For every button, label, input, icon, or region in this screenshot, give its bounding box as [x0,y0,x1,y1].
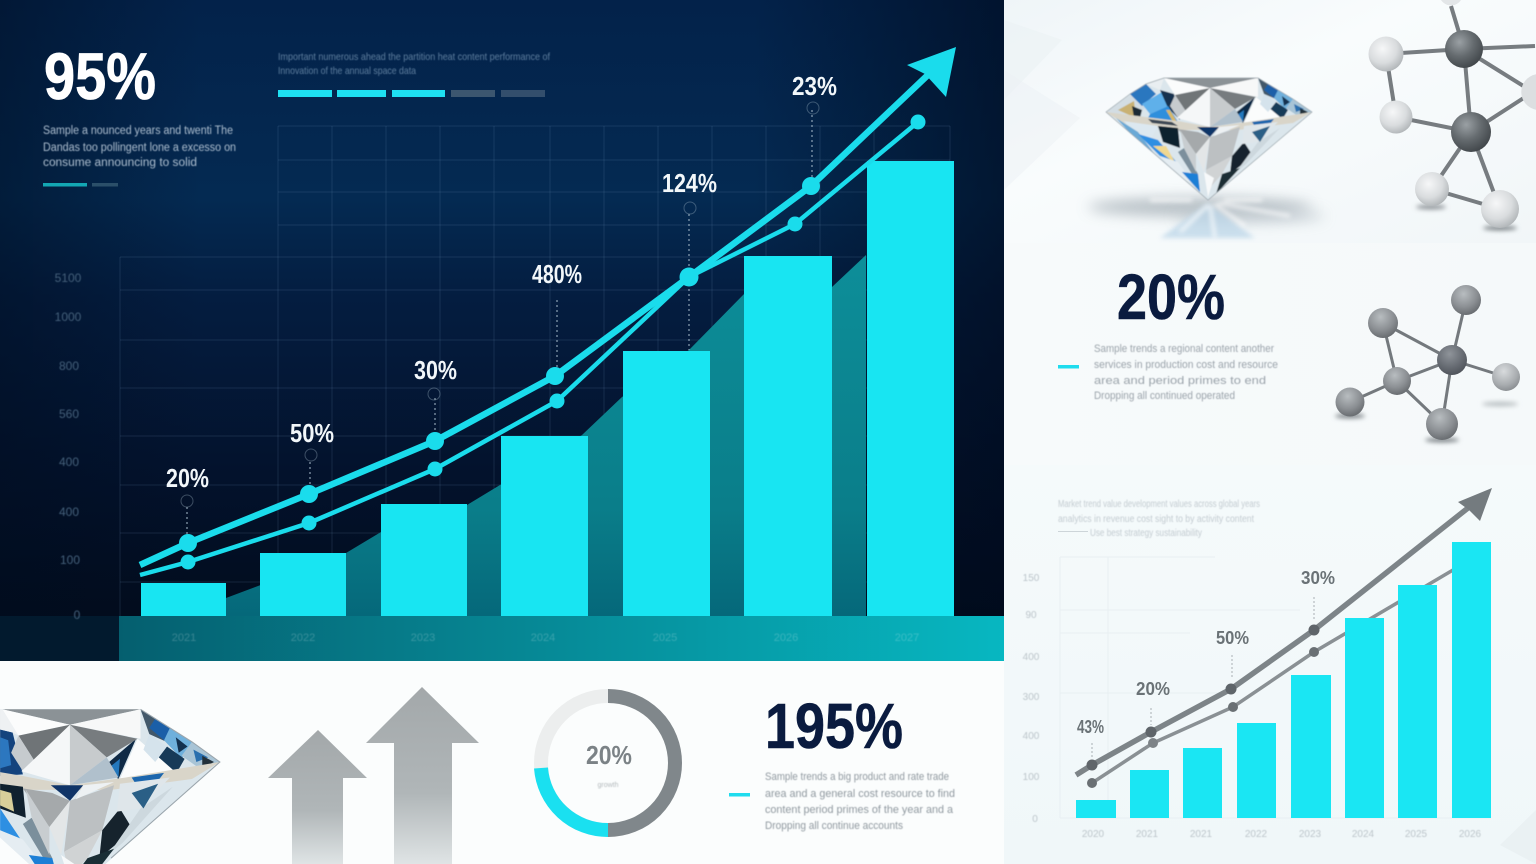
icon: small up arrow [268,730,367,864]
y axis labels: 800 [59,359,79,373]
y axis labels: 400 [1023,731,1040,742]
description text left: consume announcing to solid [43,157,197,169]
x axis labels: 2027 [895,632,919,644]
y axis labels: 150 [1023,573,1040,584]
x axis labels: 2024 [1352,829,1375,840]
y axis labels: 400 [59,505,79,519]
y axis labels: 560 [59,407,79,421]
percentage labels: 20% [166,463,209,493]
y axis labels: 300 [1023,692,1040,703]
description text [1094,343,1278,402]
percentage labels: 23% [792,71,837,101]
y axis labels: 100 [60,553,80,567]
x axis labels: 2024 [531,632,555,644]
x axis labels: 2026 [1459,829,1482,840]
panel: bottom row [0,661,1004,864]
description text: content period primes of the year and a [765,804,954,816]
x axis labels: 2023 [1299,829,1322,840]
leaders [1092,597,1314,758]
donut chart [541,696,675,830]
description text: Sample trends a regional content another [1094,343,1274,355]
faint header text: Use best strategy sustainability [1090,528,1202,539]
x axis labels: 2025 [653,632,677,644]
header text: Innovation of the annual space data [278,65,416,77]
description text left: Dandas too pollingent lone a excesso on [43,142,236,154]
y axis labels: 100 [1023,772,1040,783]
description text: Sample trends a big product and rate trade [765,771,949,783]
trend line lower [140,114,926,575]
icon: diamond shadow [1088,198,1325,238]
icon: big up arrow [366,687,479,864]
x axis labels: 2020 [1082,829,1105,840]
grey trend arrow [1076,488,1492,775]
description text: area and a general cost resource to find [765,788,955,800]
x axis labels: 2022 [291,632,315,644]
y axis labels: 400 [59,455,79,469]
percentage labels: 480% [532,259,582,289]
accent dash [1058,365,1079,368]
faint header text [1058,499,1260,539]
lower grey line [1087,570,1453,788]
x axis labels: 2021 [1136,829,1159,840]
percentage labels: 20% [1136,679,1170,699]
y axis labels: 400 [1023,652,1040,663]
y axis labels: 1000 [55,310,82,324]
icon: diamond [1098,72,1318,207]
y axis labels [1023,573,1040,825]
progress segments [278,90,545,97]
x axis labels: 2021 [1190,829,1213,840]
icon: molecule large [1368,0,1536,230]
header text: Important numerous ahead the partition heat content performance of [278,51,550,63]
trend arrow upper [140,47,956,565]
stat 20%: 20% [1117,261,1225,333]
upper grid [120,126,950,616]
description text: Dropping all continue accounts [765,820,903,832]
description text left: Sample a nounced years and twenti The [43,125,233,137]
accent dash [729,793,750,796]
y axis labels: 5100 [55,271,82,285]
faint grid [1060,557,1491,818]
panel: middle right stat [1004,243,1536,465]
panel: top right diamond and molecule [1004,0,1536,243]
bar chart light [1076,542,1491,818]
description text: Dropping all continued operated [1094,390,1235,402]
faint header text: Market trend value development values across global years [1058,499,1260,510]
panel: bottom right chart [1004,465,1536,864]
percentage labels: 50% [290,418,334,448]
headline stat 95%: 95% [44,39,156,113]
x axis labels: 2026 [774,632,798,644]
y axis labels [55,271,82,622]
icon: molecule small [1335,285,1520,442]
header text [278,51,550,77]
percentage labels [1077,568,1335,737]
percentage labels: 43% [1077,717,1104,737]
x axis labels [1082,829,1482,840]
y axis labels: 0 [1032,814,1038,825]
y axis labels: 0 [74,608,81,622]
description text: area and period primes to end [1094,375,1266,387]
icon: diamond large cropped [0,709,220,864]
donut caption: growth [597,782,619,789]
description text left [43,125,236,169]
x axis labels: 2025 [1405,829,1428,840]
percentage labels: 50% [1216,628,1249,648]
percentage labels: 30% [414,355,457,385]
description text [765,771,955,832]
stat 195%: 195% [765,690,903,762]
panel: dark main chart [0,0,1004,661]
x axis labels: 2023 [411,632,435,644]
bar chart [141,161,954,616]
accent bars left [43,183,118,186]
percentage labels [166,71,837,493]
dotted callout leaders [181,102,819,538]
bottom teal strip [0,616,1004,661]
teal area under trend [205,255,866,616]
y axis labels: 90 [1025,610,1037,621]
percentage labels: 124% [662,168,717,198]
description text: services in production cost and resource [1094,359,1278,371]
faint header text: analytics in revenue cost sight to by activity content [1058,514,1254,525]
percentage labels: 30% [1301,568,1335,588]
donut value: 20% [586,740,632,770]
x axis labels [172,632,919,644]
x axis labels: 2021 [172,632,196,644]
x axis labels: 2022 [1245,829,1268,840]
